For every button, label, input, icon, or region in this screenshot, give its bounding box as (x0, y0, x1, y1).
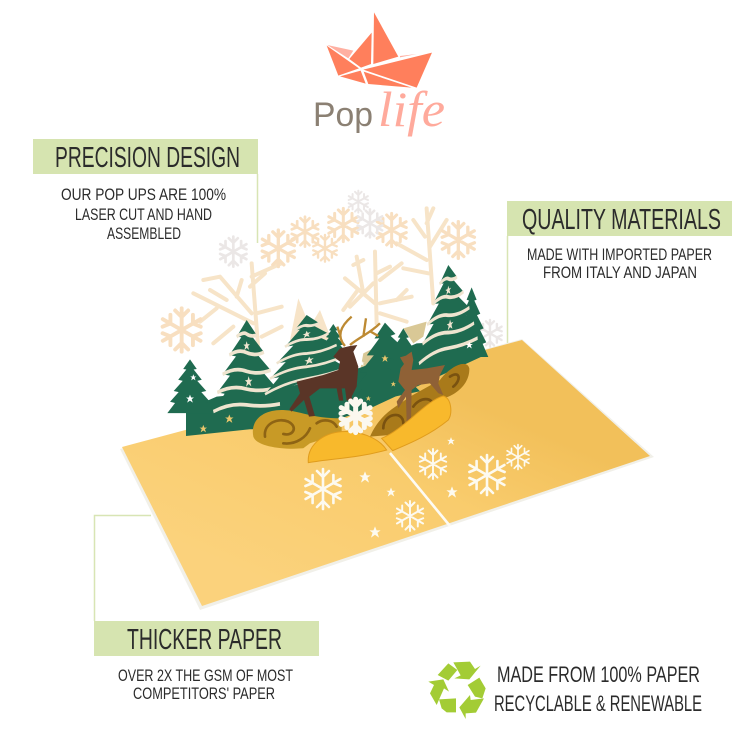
panel: recyclable note (428, 662, 702, 719)
card base (120, 339, 654, 610)
card snowflakes (305, 444, 529, 531)
icon: recycle (428, 662, 486, 719)
deer: doe (397, 352, 445, 423)
body text: COMPETITORS' PAPER (133, 684, 275, 703)
connector lines (94, 174, 508, 621)
heading: THICKER PAPER (127, 624, 282, 656)
pop-up scene (163, 191, 502, 463)
cream trees and snowflakes (163, 191, 502, 352)
heading: PRECISION DESIGN (55, 142, 240, 174)
golden scrolls (253, 364, 469, 449)
note text (494, 662, 702, 716)
logo: Poplife (313, 12, 445, 137)
logo wordmark: life (378, 81, 445, 137)
body text: OUR POP UPS ARE 100% (61, 185, 226, 204)
deer: stag (289, 317, 380, 417)
body text (61, 185, 226, 243)
body text: LASER CUT AND HAND (75, 205, 212, 224)
pop-up card (120, 191, 654, 610)
body text: ASSEMBLED (107, 224, 181, 243)
heading banner (507, 201, 732, 236)
body text (527, 245, 712, 282)
panel: thicker paper (94, 621, 319, 703)
panel: precision design (33, 139, 258, 243)
logo wordmark (313, 81, 445, 137)
icon: paper boat (327, 12, 432, 88)
body text: OVER 2X THE GSM OF MOST (118, 666, 293, 685)
card stars (359, 437, 458, 538)
body text (118, 666, 293, 703)
gold front arches (308, 396, 451, 463)
body text: FROM ITALY AND JAPAN (543, 263, 697, 282)
panel: quality materials (507, 201, 732, 282)
logo wordmark: Pop (313, 96, 373, 134)
snowflake centerpiece (341, 399, 370, 433)
green forest (167, 253, 488, 436)
heading banner (94, 621, 319, 656)
heading banner (33, 139, 258, 174)
